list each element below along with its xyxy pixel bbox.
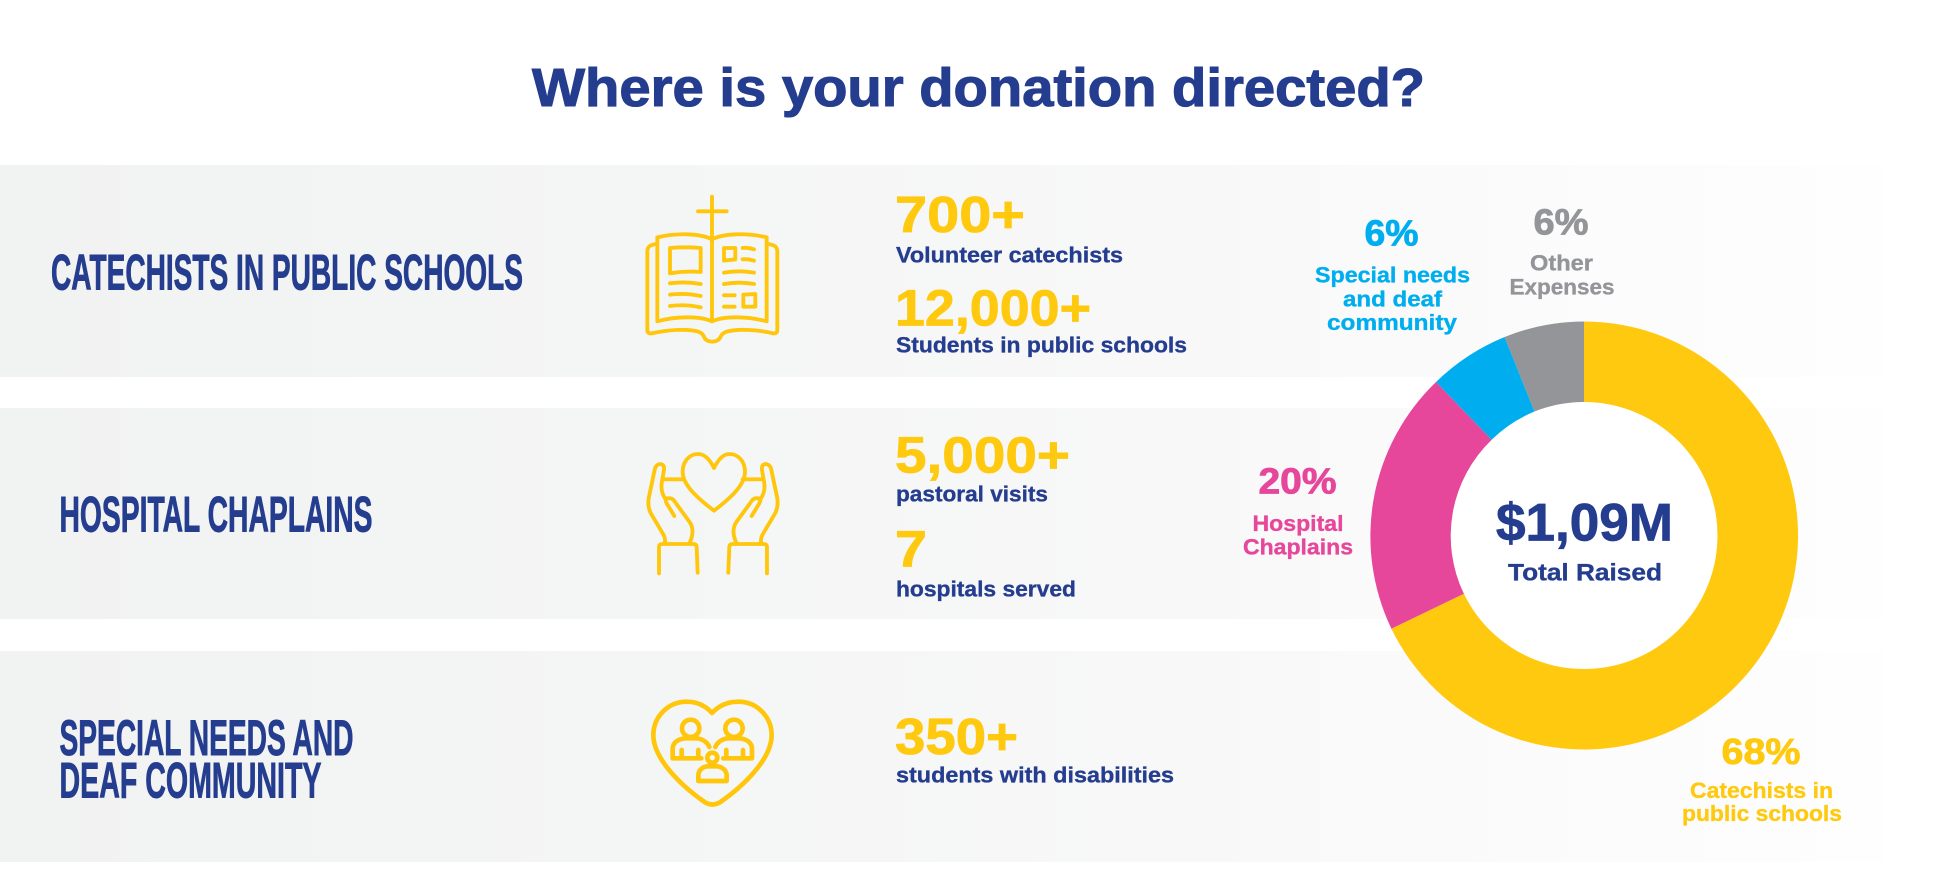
heading: catechists: CATECHISTS IN PUBLIC SCHOOLS [51, 244, 523, 300]
icon: hands holding heart [648, 454, 778, 573]
stat: 5,000+: 5,000+ [895, 427, 1070, 484]
percent: 20% [1258, 461, 1336, 502]
label: special needs 6% [1315, 212, 1470, 335]
stat label: students in public schools: Students in public schools [896, 333, 1187, 358]
panel: special needs and deaf community [0, 651, 1885, 862]
stat: 7: 7 [895, 521, 927, 578]
caption: Chaplains [1243, 535, 1353, 560]
stat: 12,000+: 12,000+ [895, 280, 1091, 337]
center hole [1370, 322, 1798, 750]
label: hospital chaplains 20% [1243, 461, 1353, 560]
caption: Hospital [1252, 511, 1344, 536]
panel background: special needs [0, 651, 1885, 862]
percent: 68% [1722, 731, 1800, 772]
segment: hospital chaplains 20% [1370, 382, 1492, 629]
heading: special needs: SPECIAL NEEDS AND [60, 710, 354, 766]
segment: catechists 68% [1391, 322, 1798, 750]
panel: catechists in public schools [0, 165, 1885, 377]
label: other expenses 6% [1510, 202, 1614, 300]
stat: 350+: 350+ [895, 708, 1018, 765]
caption: community [1327, 310, 1458, 335]
stat label: hospitals served: hospitals served [896, 577, 1076, 602]
percent: 6% [1364, 212, 1418, 253]
stat label: pastoral visits: pastoral visits [896, 482, 1048, 507]
label: catechists 68% [1682, 731, 1842, 826]
panel: hospital chaplains [0, 408, 1885, 619]
donut chart [1370, 322, 1798, 750]
icon: heart with people [653, 702, 772, 804]
caption: Catechists in [1690, 778, 1833, 803]
caption: Expenses [1510, 275, 1614, 300]
percent: 6% [1534, 202, 1588, 243]
heading: special needs: DEAF COMMUNITY [60, 753, 322, 809]
segment: special needs 6% [1436, 337, 1534, 440]
stat label: volunteer catechists: Volunteer catechists [896, 243, 1123, 268]
panel background: chaplains [0, 408, 1885, 619]
caption: public schools [1682, 801, 1842, 826]
segment: other expenses 6% [1505, 322, 1584, 412]
stat: 700+: 700+ [895, 186, 1025, 243]
caption: Special needs [1315, 263, 1470, 288]
caption: and deaf [1343, 287, 1443, 312]
caption: Other [1530, 251, 1593, 276]
icon: open bible with cross [647, 197, 777, 342]
stat label: students with disabilities: students with disabilities [896, 763, 1174, 788]
center total: $1,09M [1496, 493, 1673, 552]
center caption: Total Raised [1508, 559, 1662, 586]
panel background: catechists [0, 165, 1885, 377]
heading: chaplains: HOSPITAL CHAPLAINS [60, 487, 372, 543]
title: Where is your donation directed? [532, 58, 1425, 118]
